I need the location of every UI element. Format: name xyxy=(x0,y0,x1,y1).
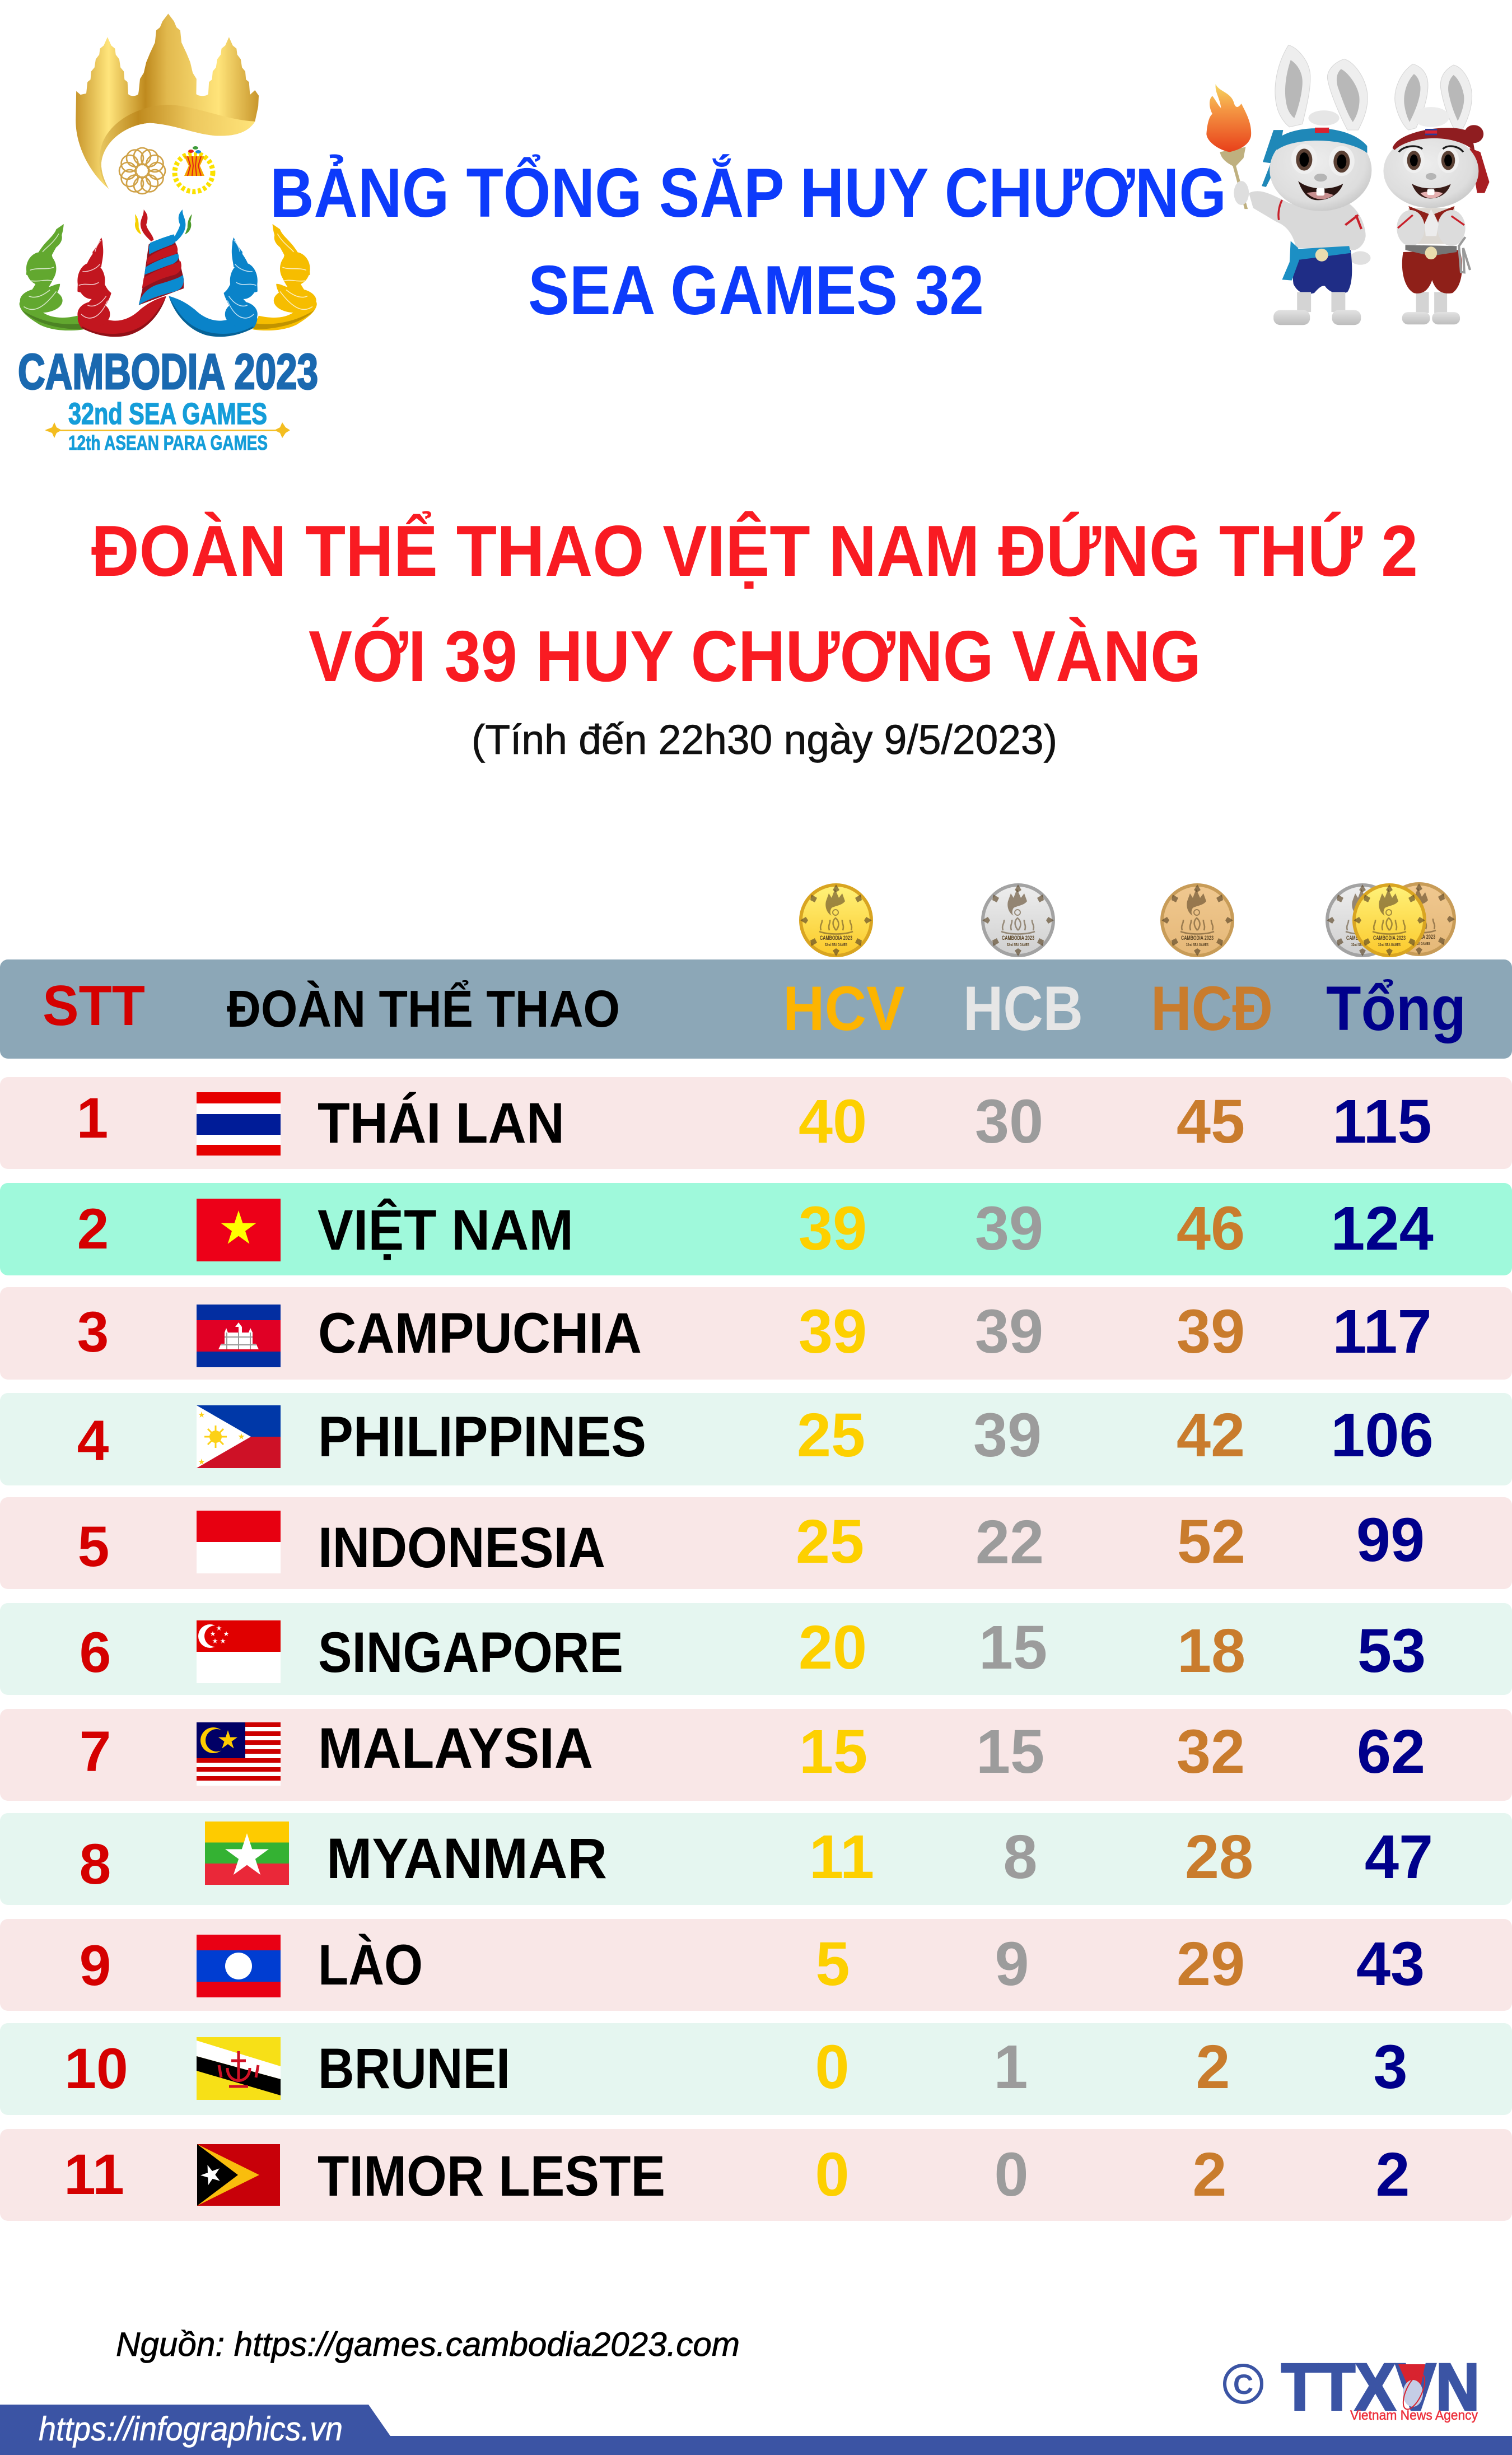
row 1: Thailand xyxy=(0,1077,1512,1169)
row 8: Myanmar: MYANMAR xyxy=(326,1827,607,1890)
row 6: Singapore: 18 xyxy=(1177,1617,1245,1685)
logo: CAMBODIA 2023: CAMBODIA 2023 xyxy=(18,343,318,399)
row 8: Myanmar: 47 xyxy=(1365,1823,1433,1892)
row 4: Philippines: 106 xyxy=(1331,1401,1434,1470)
row 4: Philippines: 39 xyxy=(973,1401,1042,1470)
title line 1: BẢNG TỔNG SẮP HUY CHƯƠNG xyxy=(270,154,1226,232)
row 3: Cambodia: 39 xyxy=(799,1297,867,1366)
flag: Laos xyxy=(197,1935,281,1997)
row 9: Laos: 9 xyxy=(80,1934,111,1997)
row 10: Brunei: 1 xyxy=(993,2033,1028,2102)
icon: silver medal xyxy=(982,884,1054,956)
row 2: Vietnam xyxy=(0,1183,1512,1275)
row 6: Singapore: 6 xyxy=(80,1620,111,1684)
flag: Vietnam xyxy=(197,1199,281,1261)
flag: Singapore xyxy=(197,1620,281,1683)
row 3: Cambodia: 39 xyxy=(1177,1297,1245,1366)
row 5: Indonesia: 22 xyxy=(976,1508,1044,1577)
header: total: Tổng xyxy=(1326,973,1466,1044)
row 4: Philippines: 42 xyxy=(1177,1401,1245,1470)
row 6: Singapore: 20 xyxy=(799,1613,867,1682)
flag: Philippines xyxy=(197,1405,281,1468)
row 1: Thailand: 40 xyxy=(799,1087,867,1156)
flag: Malaysia xyxy=(197,1722,281,1786)
row 4: Philippines: 4 xyxy=(77,1409,109,1473)
row 2: Vietnam: 39 xyxy=(975,1194,1043,1263)
title line 2: SEA GAMES 32 xyxy=(528,252,984,329)
row 5: Indonesia: 99 xyxy=(1356,1506,1425,1574)
row 5: Indonesia xyxy=(0,1497,1512,1589)
header: bronze: HCĐ xyxy=(1151,973,1273,1044)
row 7: Malaysia: MALAYSIA xyxy=(318,1716,593,1780)
subtitle line 2: VỚI 39 HUY CHƯƠNG VÀNG xyxy=(309,616,1201,697)
row 5: Indonesia: 52 xyxy=(1177,1507,1245,1576)
row 4: Philippines: PHILIPPINES xyxy=(318,1405,646,1469)
row 9: Laos: 29 xyxy=(1177,1930,1245,1999)
row 1: Thailand: 30 xyxy=(975,1087,1043,1156)
row 10: Brunei: 10 xyxy=(64,2037,128,2100)
row 11: Timor Leste: 2 xyxy=(1192,2140,1227,2209)
row 9: Laos: 43 xyxy=(1356,1930,1425,1999)
copyright logo TTXVN xyxy=(1225,2350,1480,2424)
row 6: Singapore xyxy=(0,1603,1512,1695)
logo: 32nd SEA GAMES: 32nd SEA GAMES xyxy=(68,397,267,431)
row 10: Brunei xyxy=(0,2023,1512,2115)
heading: main title xyxy=(270,154,1226,329)
row 10: Brunei: 2 xyxy=(1196,2033,1230,2102)
row 11: Timor Leste: 2 xyxy=(1375,2140,1410,2209)
logo: red and blue nagas xyxy=(77,237,258,337)
logo: golden crown xyxy=(76,13,259,189)
row 7: Malaysia xyxy=(0,1709,1512,1801)
row 9: Laos: 9 xyxy=(995,1930,1029,1999)
row 2: Vietnam: 39 xyxy=(799,1194,867,1263)
footer band xyxy=(0,2405,1512,2455)
row 7: Malaysia: 7 xyxy=(80,1720,111,1783)
flag: Thailand xyxy=(197,1092,281,1156)
subtitle line 1: ĐOÀN THỂ THAO VIỆT NAM ĐỨNG THỨ 2 xyxy=(91,510,1418,591)
icon: gold medal xyxy=(800,884,872,956)
row 3: Cambodia: CAMPUCHIA xyxy=(318,1301,642,1365)
row 10: Brunei: BRUNEI xyxy=(318,2037,510,2100)
header: team: ĐOÀN THỂ THAO xyxy=(227,980,620,1038)
row 4: Philippines xyxy=(0,1393,1512,1485)
table header band xyxy=(0,959,1512,1059)
medal icons xyxy=(800,883,1455,956)
row 7: Malaysia: 32 xyxy=(1177,1717,1245,1786)
row 3: Cambodia: 117 xyxy=(1332,1297,1432,1366)
heading: red subtitle xyxy=(91,510,1418,697)
logo: green and yellow nagas xyxy=(20,224,317,330)
row 8: Myanmar: 8 xyxy=(1003,1823,1038,1892)
row 10: Brunei: 3 xyxy=(1373,2033,1408,2102)
row 11: Timor Leste: TIMOR LESTE xyxy=(318,2144,665,2208)
flag: Timor Leste xyxy=(197,2144,280,2206)
row 6: Singapore: SINGAPORE xyxy=(318,1620,623,1684)
icon: copyright circle: C xyxy=(1233,2369,1253,2400)
row 6: Singapore: 15 xyxy=(979,1613,1047,1682)
row 9: Laos: 5 xyxy=(815,1930,850,1999)
row 6: Singapore: 53 xyxy=(1357,1617,1426,1685)
icon: bronze medal xyxy=(1161,884,1233,956)
row 9: Laos: LÀO xyxy=(318,1933,423,1997)
row 7: Malaysia: 62 xyxy=(1357,1717,1425,1786)
row 1: Thailand: 45 xyxy=(1177,1087,1245,1156)
row 7: Malaysia: 15 xyxy=(799,1717,867,1786)
row 11: Timor Leste: 0 xyxy=(815,2140,850,2209)
row 1: Thailand: 1 xyxy=(77,1086,108,1150)
logo: ASEAN emblem xyxy=(175,145,213,192)
header: STT: STT xyxy=(43,975,145,1037)
icon: red V and globe xyxy=(1398,2364,1429,2412)
row 2: Vietnam: 46 xyxy=(1177,1194,1245,1263)
logo: 12th ASEAN PARA GAMES: 12th ASEAN PARA GAMES xyxy=(68,431,268,454)
flag: Myanmar xyxy=(205,1822,289,1885)
source note: Nguồn: https://games.cambodia2023.com xyxy=(116,2326,740,2363)
row 9: Laos xyxy=(0,1919,1512,2011)
row 2: Vietnam: 124 xyxy=(1331,1194,1434,1263)
icon: three medals overlapped xyxy=(1327,883,1455,956)
row 11: Timor Leste xyxy=(0,2129,1512,2221)
row 11: Timor Leste: 11 xyxy=(64,2142,124,2206)
row 8: Myanmar: 8 xyxy=(80,1832,111,1896)
row 5: Indonesia: 25 xyxy=(796,1507,864,1576)
footer URL: https://infographics.vn xyxy=(39,2410,343,2448)
logo artwork: crown and nagas xyxy=(20,13,317,337)
row 1: Thailand: THÁI LAN xyxy=(318,1091,564,1155)
row 10: Brunei: 0 xyxy=(815,2033,850,2102)
row 3: Cambodia: 3 xyxy=(77,1300,109,1364)
flag: Indonesia xyxy=(197,1511,281,1573)
row 11: Timor Leste: 0 xyxy=(994,2140,1029,2209)
mascot: girl rabbit xyxy=(1383,64,1490,324)
logo: flower emblem xyxy=(119,148,165,194)
row 1: Thailand: 115 xyxy=(1332,1087,1432,1156)
row 8: Myanmar xyxy=(0,1813,1512,1905)
row 4: Philippines: 25 xyxy=(797,1401,865,1470)
header: silver: HCB xyxy=(963,973,1083,1044)
row 7: Malaysia: 15 xyxy=(976,1717,1044,1786)
row 2: Vietnam: 2 xyxy=(77,1197,109,1261)
mascot: boy rabbit with torch xyxy=(1206,45,1371,325)
logo: Cambodia 2023 SEA Games xyxy=(18,13,318,454)
row 5: Indonesia: INDONESIA xyxy=(318,1516,605,1580)
header: gold: HCV xyxy=(783,973,905,1044)
date note: (Tính đến 22h30 ngày 9/5/2023) xyxy=(472,716,1057,763)
flag: Brunei xyxy=(197,2037,281,2100)
logo: ornament line xyxy=(45,422,290,438)
flag: Cambodia xyxy=(197,1305,281,1367)
row 8: Myanmar: 11 xyxy=(809,1823,874,1892)
row 3: Cambodia xyxy=(0,1287,1512,1380)
row 3: Cambodia: 39 xyxy=(975,1297,1043,1366)
logo: central knot xyxy=(135,209,192,305)
mascots xyxy=(1206,45,1490,325)
wordmark TTXVN: TTXVN xyxy=(1281,2350,1480,2424)
tagline: Vietnam News Agency xyxy=(1350,2408,1478,2423)
icon: copyright circle xyxy=(1225,2365,1262,2402)
row 8: Myanmar: 28 xyxy=(1185,1823,1253,1892)
row 2: Vietnam: VIỆT NAM xyxy=(318,1198,573,1262)
medal table xyxy=(0,1077,1512,2221)
row 5: Indonesia: 5 xyxy=(78,1515,109,1578)
